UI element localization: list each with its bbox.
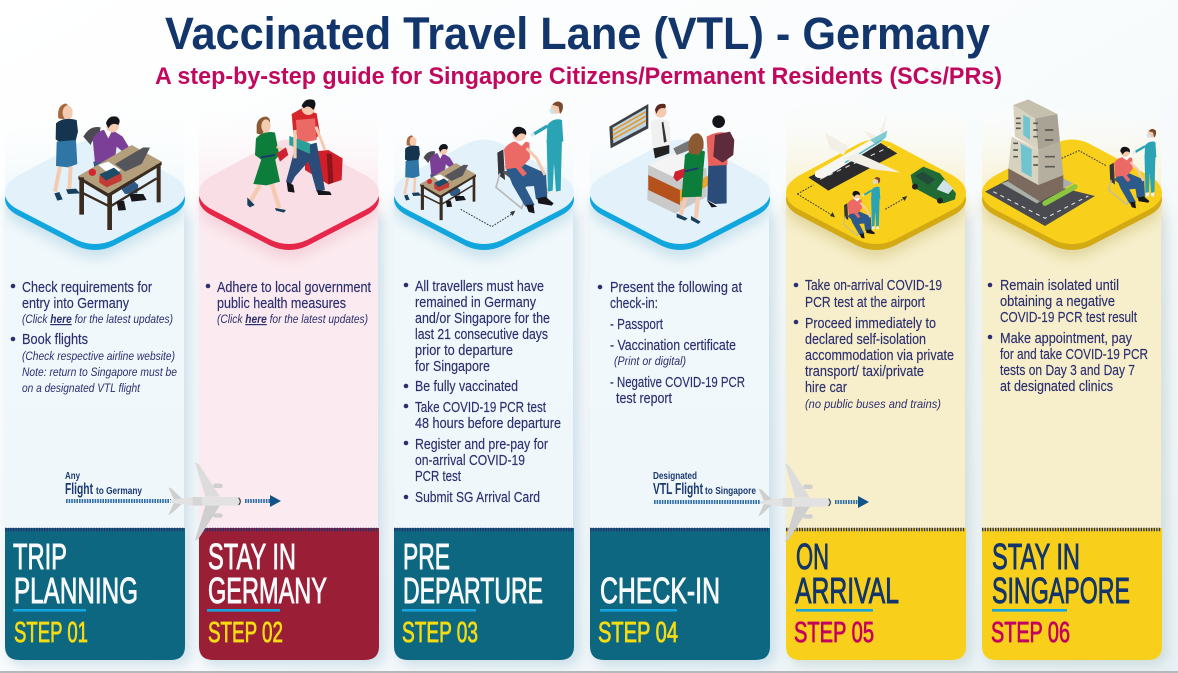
step footer: [590, 528, 770, 660]
step footer: STEP 04: [598, 617, 678, 649]
text: pre departure instructions: Register and pre-pay for: [415, 437, 548, 453]
text: check-in instructions: - Negative COVID-19 PCR: [610, 375, 745, 391]
text: pre departure instructions: on-arrival COVID-19: [415, 453, 525, 469]
step footer: [5, 528, 185, 660]
arrow: designated vtl flight to singapore: VTL Flight: [653, 481, 703, 498]
text: check-in instructions: (Print or digital): [614, 354, 686, 368]
arrow: designated vtl flight to singapore: to Singapore: [705, 485, 756, 497]
text: pre departure instructions: 48 hours before departure: [415, 416, 561, 432]
text: trip planning instructions: Check requirements for: [22, 280, 152, 296]
text: stay in singapore instructions: COVID-19 PCR test result: [1000, 310, 1137, 326]
step footer: [982, 528, 1162, 660]
step footer: STEP 01: [14, 617, 88, 649]
panel: step 05 on arrival: [786, 100, 972, 666]
text: stay in germany instructions: public health measures: [217, 296, 346, 312]
subtitle: A step-by-step guide for Singapore Citizens/Permanent Residents (SCs/PRs): [155, 63, 1002, 90]
step footer: TRIP: [13, 536, 67, 577]
text: stay in singapore instructions: tests on Day 3 and Day 7: [1000, 363, 1135, 379]
text: on arrival instructions: [794, 278, 954, 411]
step footer: ON: [796, 536, 829, 577]
icon: woman watching man at desk with laptop: [54, 103, 162, 230]
step footer: GERMANY: [208, 570, 327, 611]
text: check-in instructions: Present the following at: [610, 280, 742, 296]
text: pre departure instructions: Submit SG Arrival Card: [415, 490, 540, 506]
step footer: CHECK-IN: [600, 570, 720, 611]
icon: airport check-in counter: [609, 104, 734, 224]
step footer: STAY IN: [992, 536, 1080, 577]
text: stay in germany instructions: (Click here for the latest updates): [217, 312, 368, 326]
arrow: any flight to germany: Any: [65, 470, 80, 482]
icon: airport runway, plane, test and car: [797, 114, 956, 238]
arrow: any flight to germany: to Germany: [96, 485, 142, 497]
step footer: [394, 528, 574, 660]
arrow: designated vtl flight to singapore: [653, 463, 869, 542]
text: check-in instructions: check-in:: [610, 296, 658, 312]
text: stay in germany instructions: Adhere to local government: [217, 280, 371, 296]
text: stay in singapore instructions: [988, 278, 1148, 395]
arrow: any flight to germany: [65, 462, 281, 541]
text: on arrival instructions: Proceed immediately to: [805, 316, 936, 332]
text: trip planning instructions: (Click here for the latest updates): [22, 312, 173, 326]
text: trip planning instructions: on a designated VTL flight: [22, 381, 141, 395]
icon: desk scene, dotted arrow and swab test: [404, 101, 563, 227]
arrow: designated vtl flight to singapore: Designated: [653, 470, 697, 482]
step footer: DEPARTURE: [403, 570, 543, 611]
step footer: [199, 528, 379, 660]
text: trip planning instructions: (Check respective airline website): [22, 349, 175, 363]
text: on arrival instructions: (no public buses and trains): [805, 397, 941, 411]
text: stay in singapore instructions: at designated clinics: [1000, 379, 1113, 395]
step footer: STEP 03: [402, 617, 478, 649]
icon: couple walking with luggage: [247, 99, 343, 213]
title: Vaccinated Travel Lane (VTL) - Germany: [165, 8, 990, 59]
text: pre departure instructions: Take COVID-19 PCR test: [415, 400, 546, 416]
text: check-in instructions: - Passport: [610, 317, 663, 333]
text: check-in instructions: [598, 280, 745, 407]
text: trip planning instructions: entry into Germany: [22, 296, 130, 312]
text: on arrival instructions: hire car: [805, 380, 847, 396]
arrow: any flight to germany: Flight: [65, 481, 93, 498]
panel: step 03 pre departure: [394, 100, 580, 666]
text: pre departure instructions: remained in Germany: [415, 295, 537, 311]
text: trip planning instructions: Book flights: [22, 332, 88, 348]
icon: isolation hotel and swab test: [985, 99, 1156, 226]
panel: step 02 stay in germany: [199, 99, 385, 666]
step footer: PRE: [403, 536, 450, 577]
text: on arrival instructions: PCR test at the airport: [805, 295, 925, 311]
text: check-in instructions: test report: [616, 391, 672, 407]
text: stay in singapore instructions: Make appointment, pay: [1000, 331, 1133, 347]
text: stay in singapore instructions: Remain isolated until: [1000, 278, 1119, 294]
text: pre departure instructions: [404, 279, 561, 506]
text: pre departure instructions: Be fully vaccinated: [415, 379, 518, 395]
text: stay in germany instructions: [206, 280, 371, 326]
step footer: [786, 528, 966, 660]
panel: step 04 check-in: [590, 100, 776, 666]
text: pre departure instructions: last 21 consecutive days: [415, 327, 548, 343]
step footer: PLANNING: [14, 570, 138, 611]
step footer: STEP 05: [794, 617, 874, 649]
text: on arrival instructions: Take on-arrival COVID-19: [805, 278, 942, 294]
step footer: ARRIVAL: [795, 570, 899, 611]
text: pre departure instructions: All travellers must have: [415, 279, 544, 295]
text: on arrival instructions: transport/ taxi/private: [805, 364, 924, 380]
text: on arrival instructions: declared self-isolation: [805, 332, 926, 348]
step footer: STEP 02: [208, 617, 283, 649]
step footer: STEP 06: [991, 617, 1070, 649]
text: pre departure instructions: and/or Singapore for the: [415, 311, 550, 327]
text: stay in singapore instructions: obtaining a negative: [1000, 294, 1115, 310]
text: pre departure instructions: PCR test: [415, 469, 461, 485]
text: pre departure instructions: for Singapore: [415, 359, 490, 375]
panel: step 01 trip planning: [5, 100, 191, 666]
text: pre departure instructions: prior to departure: [415, 343, 513, 359]
panel: step 06 stay in singapore: [982, 99, 1168, 666]
text: on arrival instructions: accommodation via private: [805, 348, 954, 364]
step footer: STAY IN: [208, 536, 296, 577]
text: trip planning instructions: Note: return to Singapore must be: [22, 365, 177, 379]
text: stay in singapore instructions: for and take COVID-19 PCR: [1000, 347, 1148, 363]
text: trip planning instructions: [11, 280, 177, 395]
text: check-in instructions: - Vaccination certificate: [610, 338, 736, 354]
